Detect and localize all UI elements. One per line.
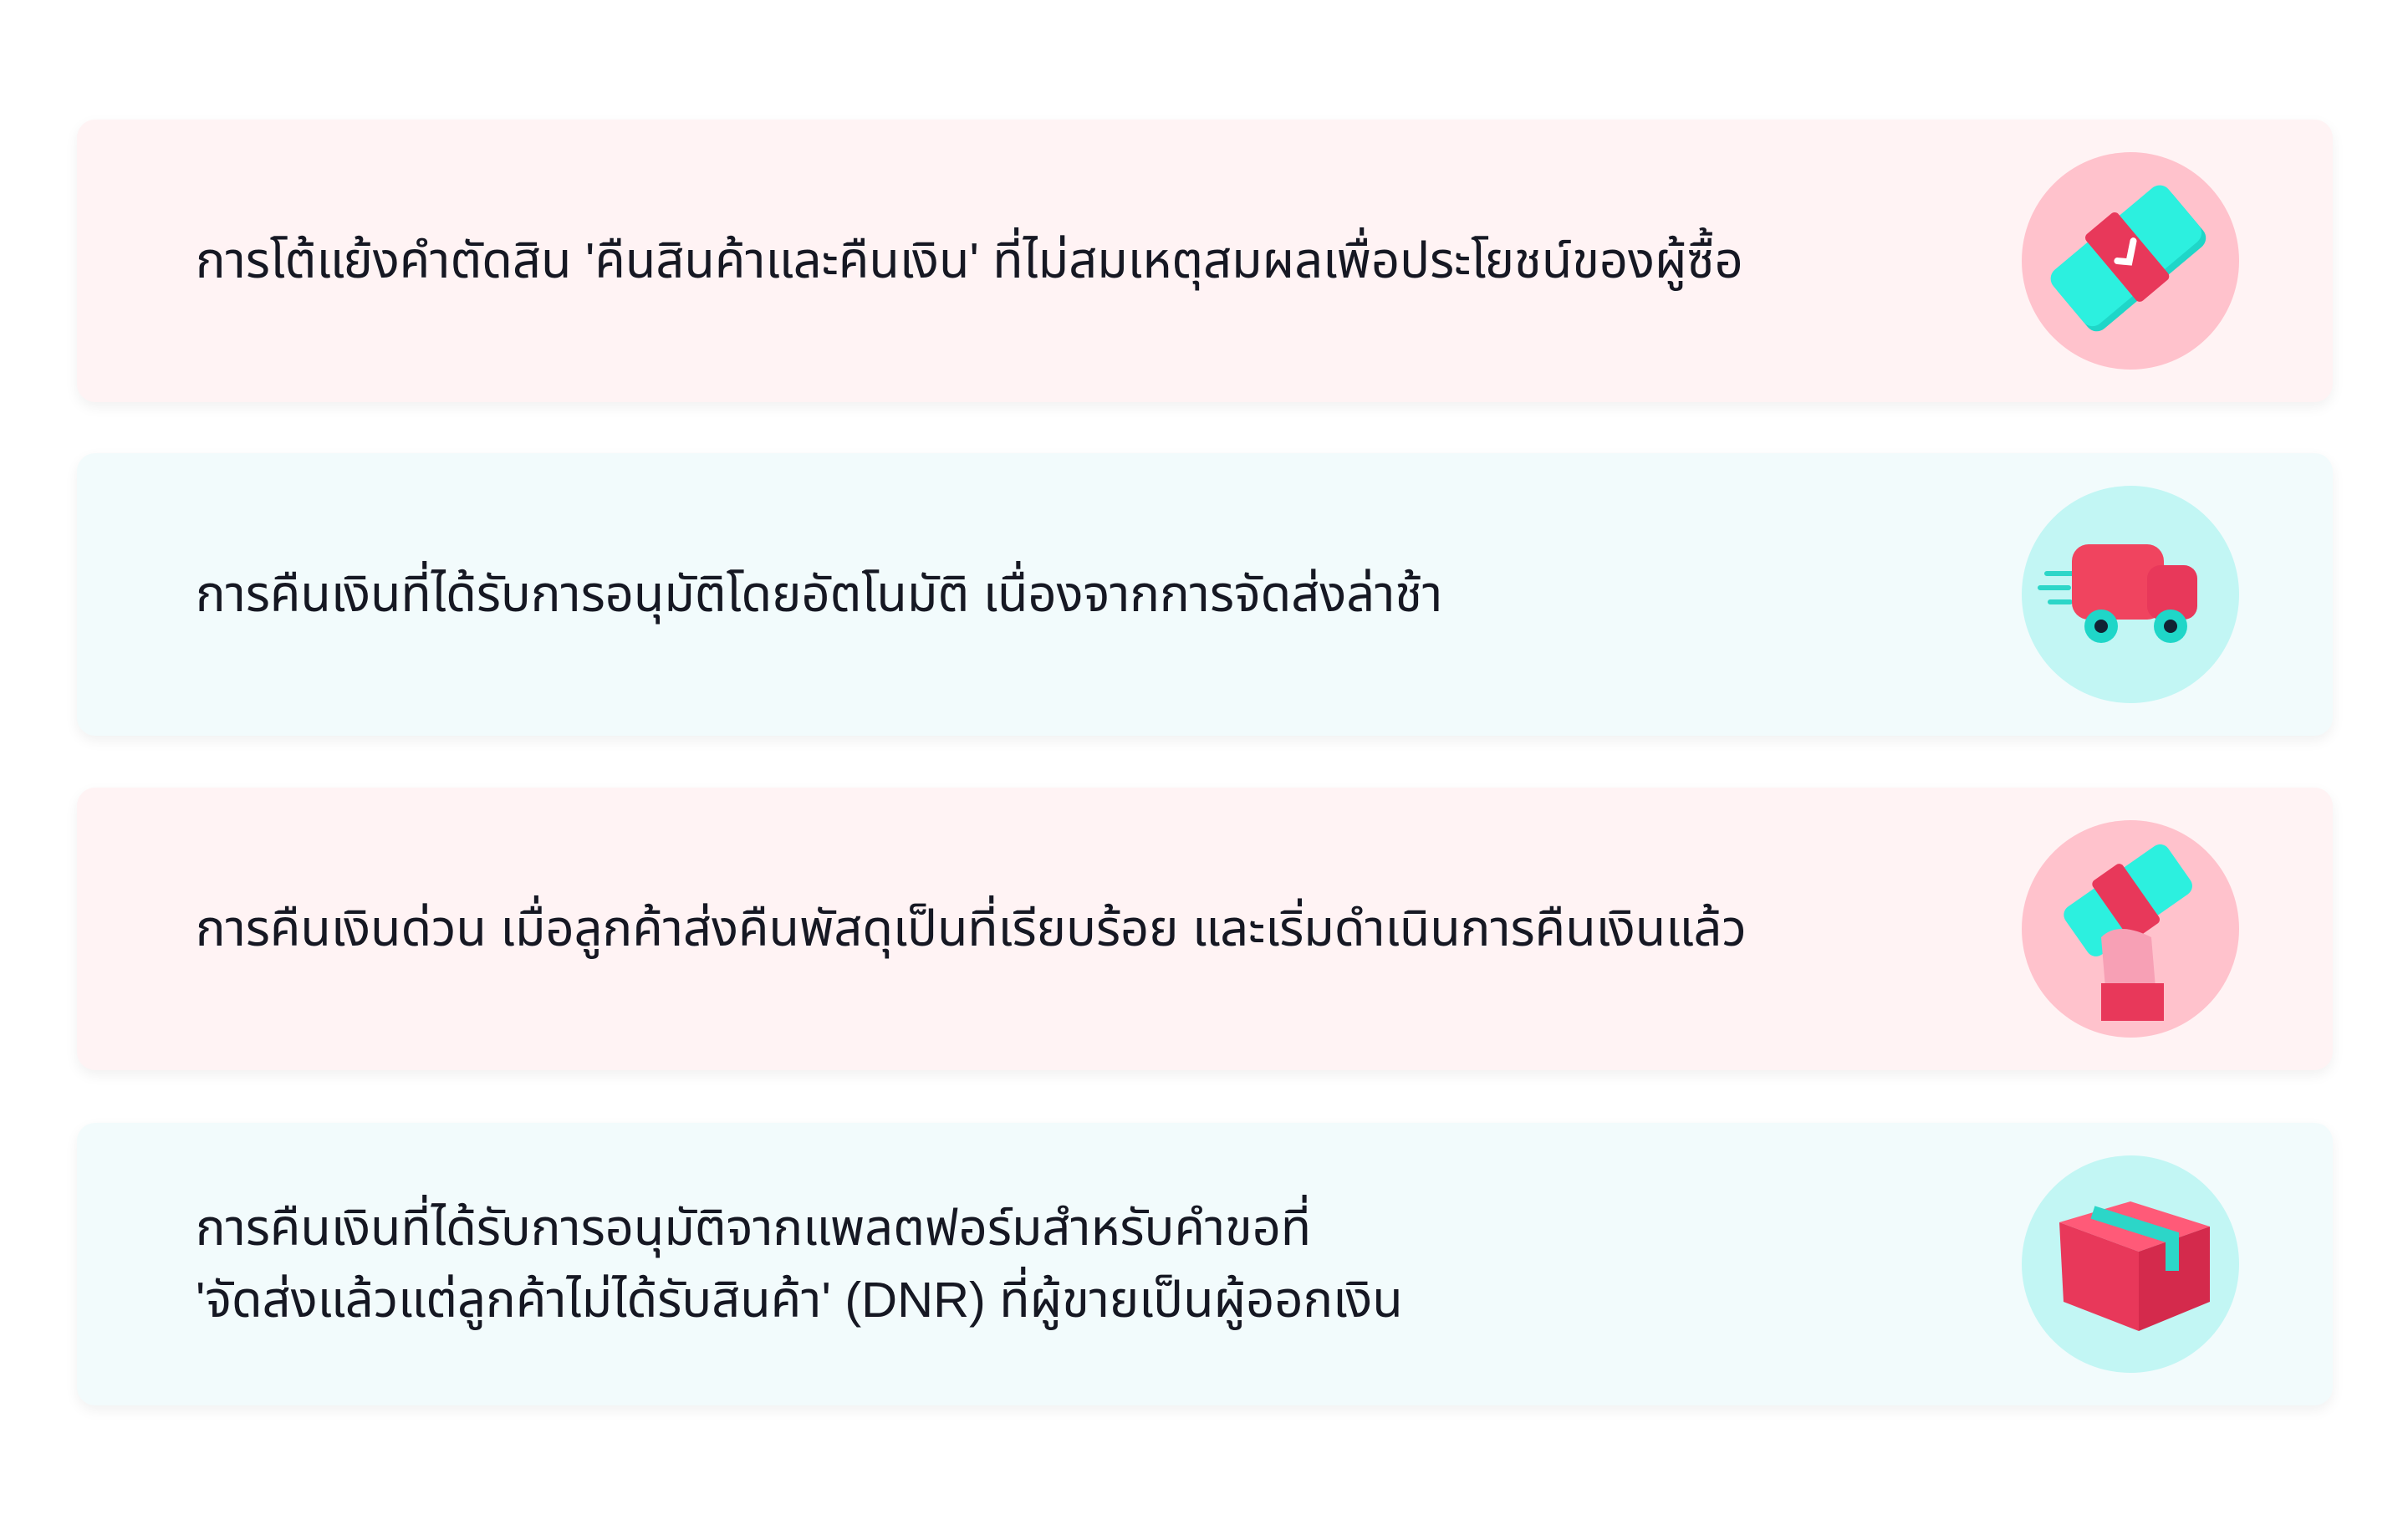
- icon: truck: [2022, 486, 2239, 703]
- text 1: การโต้แย้งคำตัดสิน 'คืนสินค้าและคืนเงิน' ที่ไม่สมเหตุสมผลเพื่อประโยชน์ของผู้ซื้อ: [196, 232, 1743, 288]
- icon: box: [2022, 1155, 2239, 1373]
- icon: hand with money: [2022, 820, 2239, 1038]
- text 4: การคืนเงินที่ได้รับการอนุมัติจากแพลตฟอร์มสำหรับคำขอที่: [196, 1200, 1311, 1256]
- panel: card 4: [77, 1123, 2333, 1405]
- text 4: [196, 1194, 1403, 1330]
- text 3: การคืนเงินด่วน เมื่อลูกค้าส่งคืนพัสดุเป็นที่เรียบร้อย และเริ่มดำเนินการคืนเงินแล้ว: [196, 900, 1747, 956]
- panel: card 2: [77, 453, 2333, 736]
- panel: card 1: [77, 120, 2333, 402]
- text 4: 'จัดส่งแล้วแต่ลูกค้าไม่ได้รับสินค้า' (DNR) ที่ผู้ขายเป็นผู้ออกเงิน: [196, 1272, 1403, 1328]
- panel: card 3: [77, 788, 2333, 1070]
- icon: money stack: [2022, 152, 2239, 370]
- text 2: การคืนเงินที่ได้รับการอนุมัติโดยอัตโนมัติ เนื่องจากการจัดส่งล่าช้า: [196, 566, 1442, 622]
